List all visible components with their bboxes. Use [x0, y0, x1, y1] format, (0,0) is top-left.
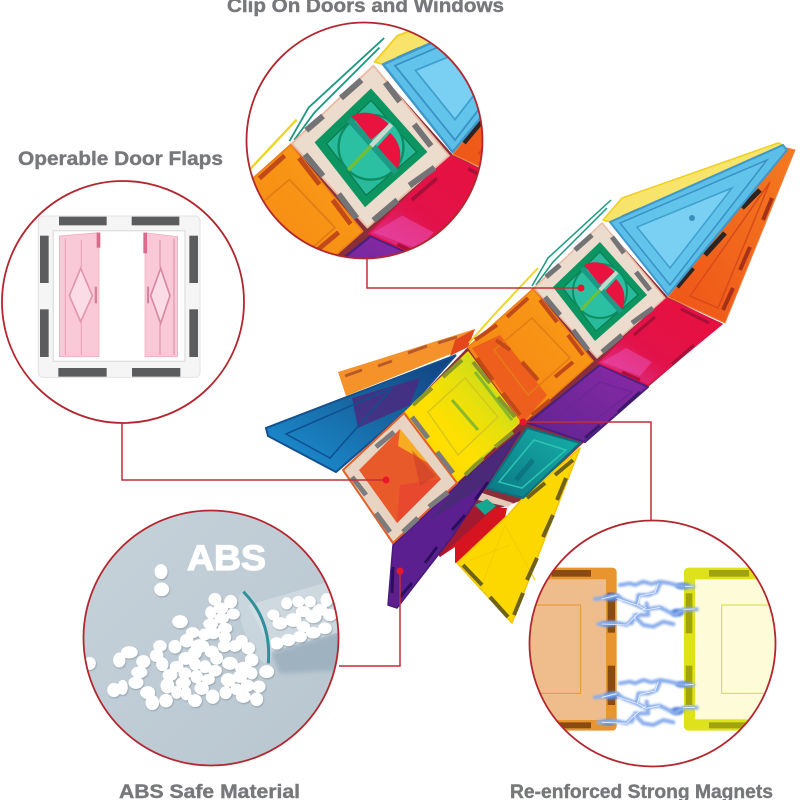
heading: operable door flaps: Operable Door Flaps — [18, 149, 223, 170]
clear square tile with orange interior — [343, 413, 457, 543]
window tile — [534, 223, 665, 358]
outline of upright yellow and teal tiles — [469, 200, 611, 343]
left door flap — [59, 233, 100, 357]
orange tile — [530, 568, 617, 731]
magnet illustration — [530, 568, 774, 731]
lightning arcs — [595, 582, 697, 627]
circle outline — [2, 181, 244, 423]
teal tile — [487, 428, 580, 498]
panel: re-enforced strong magnets — [528, 520, 776, 768]
connector: magnets callout — [520, 418, 651, 520]
enlarged rocket section — [250, 31, 482, 258]
right door flap — [143, 233, 178, 357]
purple tail fin — [388, 432, 520, 608]
connector: door flaps callout — [122, 423, 390, 484]
yellow tail fin — [457, 448, 580, 623]
yellow square tile — [405, 352, 520, 482]
panel: operable door flaps — [2, 181, 244, 423]
yellow tile — [684, 568, 774, 731]
circle outline — [84, 510, 338, 766]
connector: ABS callout — [339, 568, 404, 666]
door tile illustration — [38, 216, 200, 377]
circle outline — [530, 520, 776, 766]
panel: ABS safe material — [84, 510, 347, 766]
small teal scrap — [475, 499, 496, 515]
red tile — [598, 298, 722, 385]
back orange fin — [338, 329, 475, 396]
purple tile — [528, 365, 648, 442]
orange nose tile — [668, 148, 795, 323]
blue fin — [266, 355, 456, 472]
red rear tile — [437, 507, 507, 563]
circle photo background — [84, 510, 338, 766]
pellets and test tube — [85, 565, 347, 709]
panel: clip on doors and windows — [246, 22, 484, 260]
orange square tile — [468, 289, 593, 423]
circle outline — [246, 22, 482, 258]
dark gap backing behind the body — [343, 223, 722, 545]
rocket built from magnetic tiles — [266, 143, 795, 623]
blue nose tile — [610, 145, 787, 295]
connector: windows callout — [367, 258, 584, 292]
ABS label: ABS — [187, 539, 266, 578]
yellow upright tile beside the nose — [603, 143, 783, 222]
clear strip under teal tile — [478, 493, 513, 507]
